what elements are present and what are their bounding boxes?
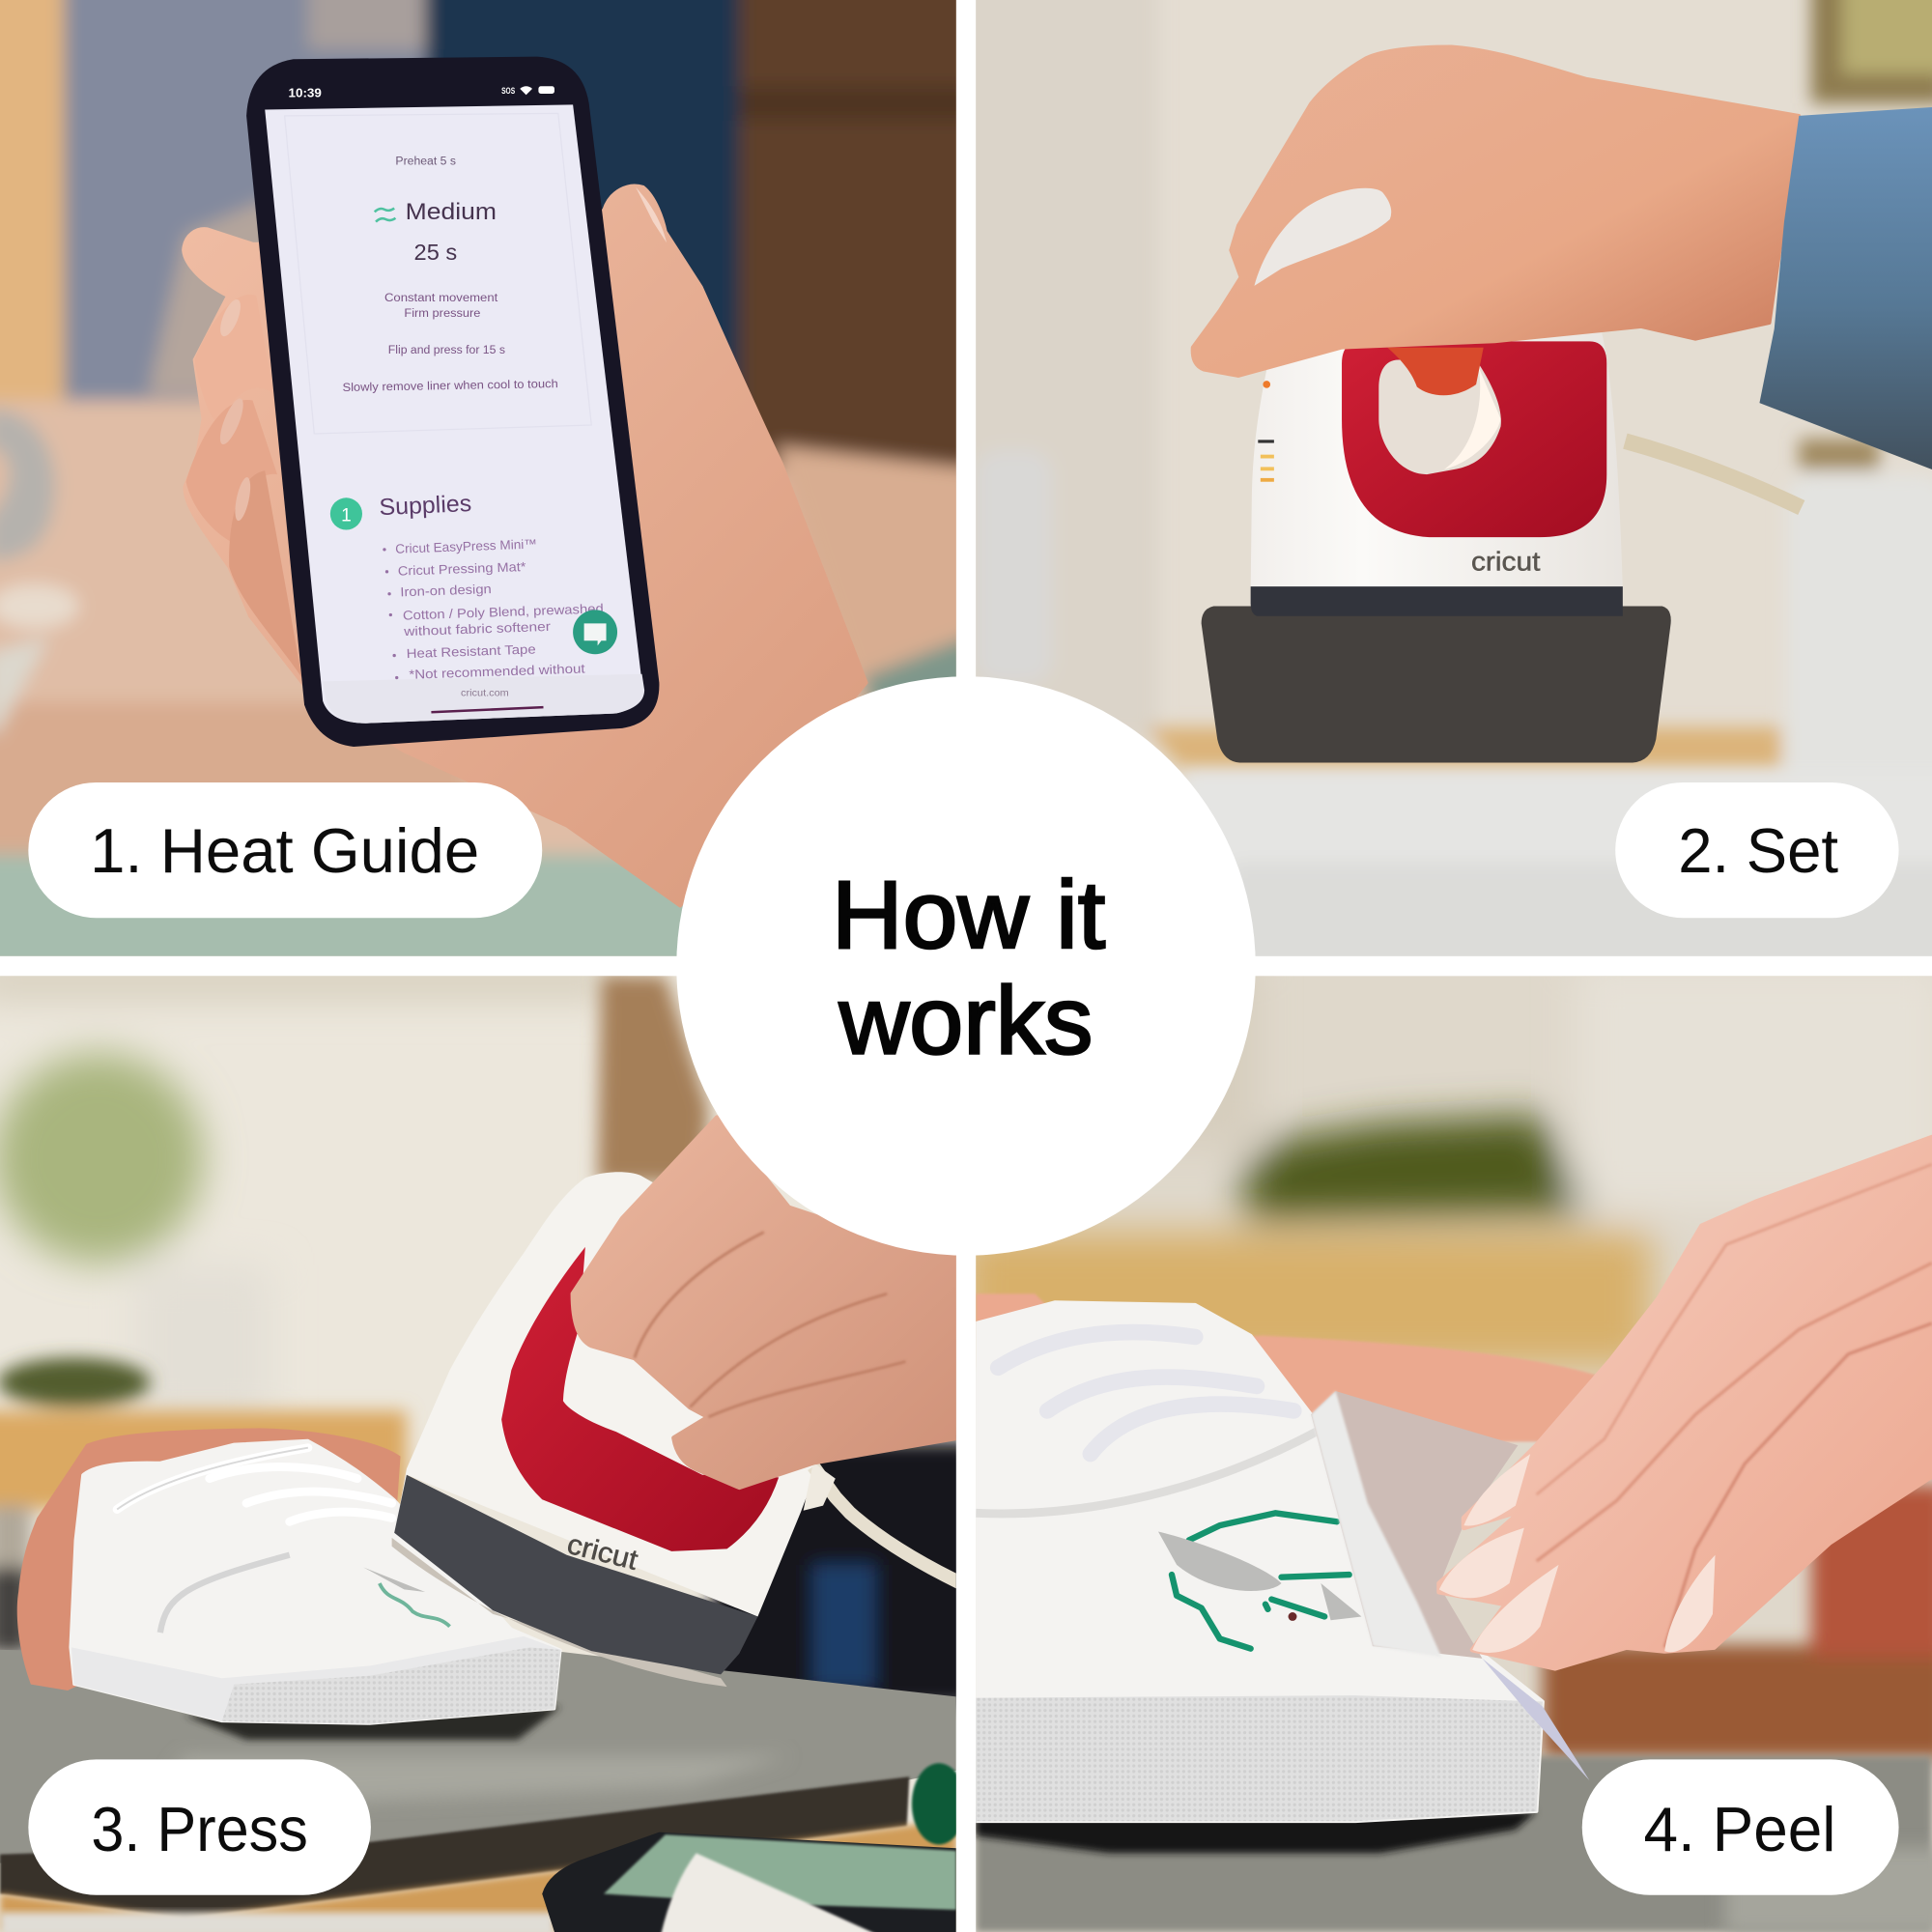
panel: step 2 set photo: [961, 0, 1932, 985]
fingernails: [220, 299, 241, 336]
icon: phone on table: [542, 1833, 956, 1932]
heat guide text: Slowly remove liner when cool to touch: [342, 377, 558, 394]
supplies list: Iron-on design: [400, 582, 492, 599]
mat dark edge: [0, 1776, 909, 1918]
press logo: cricut: [564, 1528, 641, 1577]
supplies list: Heat Resistant Tape: [406, 641, 536, 661]
icon: hand on press: [1193, 46, 1799, 376]
finger creases: [635, 1233, 906, 1417]
blurred room background: [0, 961, 616, 1426]
gray band: [394, 1475, 757, 1674]
heat guide text: Preheat 5 s: [395, 154, 456, 167]
icon: white sneaker: [71, 1440, 560, 1723]
icon: smartphone: [246, 57, 659, 747]
canvas seam: [976, 1430, 1321, 1514]
foreground table blur: [1182, 770, 1932, 985]
icon: plug housing: [804, 1463, 836, 1511]
step label: 2. Set: 2. Set: [1678, 815, 1838, 886]
supplies heading: Supplies: [379, 491, 472, 521]
design on shoe: [380, 1583, 450, 1627]
blurred room background: [0, 0, 985, 974]
step label: 4. Peel: [1582, 1759, 1899, 1895]
toe cap texture: [976, 1695, 1543, 1821]
shadow under shoe: [185, 1707, 560, 1740]
step label: 1. Heat Guide: 1. Heat Guide: [90, 815, 479, 886]
handle: [501, 1247, 779, 1551]
home indicator: [431, 707, 543, 712]
icon: green ball: [912, 1763, 966, 1844]
heat guide text: Firm pressure: [404, 306, 481, 320]
icon: medium heat waves: [375, 209, 395, 222]
supplies list: Cotton / Poly Blend, prewashed: [403, 601, 604, 623]
toe cap texture: [222, 1647, 560, 1723]
icon: cord: [813, 1466, 961, 1583]
icon: cord: [1625, 441, 1802, 508]
heat guide text: 25 s: [414, 240, 457, 265]
supplies list: Cricut Pressing Mat*: [398, 559, 526, 579]
canvas seam: [160, 1555, 290, 1633]
design on shoe: [1172, 1513, 1350, 1649]
phone screen: [265, 104, 642, 724]
supplies list: *Not recommended without: [409, 661, 585, 682]
heat guide text: Constant movement: [384, 291, 498, 304]
silver sole plate: [392, 1538, 727, 1687]
finger shading: [195, 295, 273, 425]
mat: [0, 1650, 956, 1863]
table surface: [976, 1756, 1932, 1932]
status bar: SOS: [501, 86, 515, 96]
icon: hand holding phone: [184, 185, 867, 906]
panel: step 3 press photo: [0, 961, 974, 1932]
icon: mini press: [1251, 332, 1623, 616]
blurred room background: [961, 961, 1932, 1368]
heat guide text: Medium: [406, 199, 497, 225]
laces: [998, 1332, 1293, 1454]
page card outline: [285, 113, 591, 434]
step label: 1. Heat Guide: [28, 782, 542, 918]
icon: mini press tilted: [392, 1172, 819, 1687]
step badge: 1: [341, 506, 352, 526]
step label: 3. Press: 3. Press: [91, 1794, 308, 1864]
icon: left hand on shoe: [17, 1428, 401, 1690]
blurred room background: [961, 0, 1932, 807]
press logo: cricut: [1471, 547, 1541, 577]
panel: step 4 peel photo: [961, 961, 1932, 1932]
icon: peeling hands: [1439, 1137, 1932, 1668]
status bar: 10:39: [288, 86, 322, 100]
supplies list: Cricut EasyPress Mini™: [395, 537, 537, 556]
supplies list: without fabric softener: [403, 619, 552, 639]
icon: white sneaker close-up: [976, 1302, 1543, 1821]
step label: 3. Press: [28, 1759, 371, 1895]
handle: [1342, 341, 1606, 537]
step label: 4. Peel: 4. Peel: [1644, 1794, 1836, 1864]
title: How it: [832, 862, 1105, 969]
center title circle: [676, 676, 1256, 1256]
finger creases: [1537, 1164, 1932, 1494]
fingernails: [1463, 1454, 1530, 1525]
icon: background hand: [976, 1293, 1605, 1441]
shoe shadow: [976, 1811, 1537, 1853]
laces: [117, 1448, 392, 1521]
mat highlight: [148, 1756, 788, 1811]
icon: press base: [1202, 607, 1671, 763]
status bar: [289, 86, 554, 97]
icon: denim sleeve: [1759, 107, 1932, 469]
step badge: [330, 497, 362, 529]
table: [0, 1817, 956, 1932]
heat guide text: [342, 154, 558, 394]
chat button: [573, 610, 617, 654]
fingers through handle: [1387, 348, 1484, 395]
step label: 2. Set: [1615, 782, 1899, 918]
footer band: [323, 674, 644, 724]
heat indicator lights: [1258, 381, 1274, 482]
panel: step 1 heat guide photo: [0, 0, 985, 974]
icon: press dome: [1254, 188, 1391, 286]
site footer: cricut.com: [461, 689, 509, 699]
sole stripes: [71, 1636, 560, 1723]
heat guide text: Flip and press for 15 s: [388, 343, 505, 356]
title: works: [838, 968, 1093, 1075]
peeling liner: [1311, 1391, 1589, 1780]
icon: right hand on press: [573, 1118, 956, 1488]
handle opening: [1378, 359, 1501, 474]
supplies list: [383, 537, 604, 682]
